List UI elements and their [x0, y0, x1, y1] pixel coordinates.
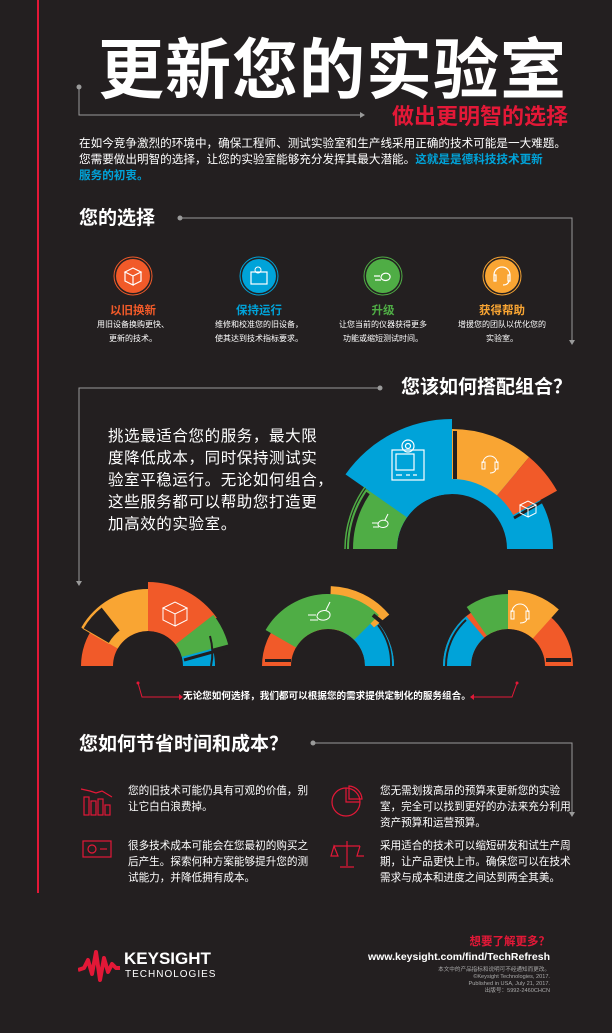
small donut C [443, 590, 573, 666]
text: shorten cycle: 需求与成本和进度之间达到两全其美。 [380, 872, 560, 884]
choice: upgrade: 升级 [372, 305, 394, 317]
title: 更新您的实验室 [98, 33, 567, 107]
text: old tech value [128, 784, 308, 813]
choice: keep running: 保持运行 [236, 305, 282, 317]
red vertical line [37, 0, 39, 893]
subtitle: 做出更明智的选择 [392, 104, 568, 129]
choice: get help [458, 256, 546, 343]
choice: upgrade [339, 256, 427, 343]
text: budget: 室，完全可以找到更好的办法来充分利用 [380, 801, 571, 813]
small donut A [81, 582, 228, 666]
caption: 无论您如何选择，我们都可以根据您的需求提供定制化的服务组合。 [183, 691, 471, 702]
icon: money [82, 840, 112, 858]
text: costs after purchase: 试能力，并降低拥有成本。 [128, 872, 255, 884]
logo: Keysight: KEYSIGHT [124, 949, 211, 968]
footer: learn more: 想要了解更多？ [470, 936, 550, 948]
combine paragraph [108, 428, 333, 533]
choice: trade-in: 更新的技术。 [109, 334, 157, 343]
intro paragraph: 服务的初衷。 [79, 169, 149, 182]
text: costs after purchase [128, 840, 308, 884]
heading: save time and cost: 您如何节省时间和成本？ [79, 734, 288, 755]
text: costs after purchase: 很多技术成本可能会在您最初的购买之 [128, 840, 308, 852]
choice: trade-in: 用旧设备换购更快、 [97, 320, 169, 329]
footer: learn more: www.keysight.com/find/TechRefresh [368, 951, 550, 963]
choice: get help: 获得帮助 [479, 305, 525, 317]
icon: bar chart [80, 788, 112, 816]
footer: learn more: 本文中的产品指标和说明可不经通知而更改。 [438, 967, 550, 973]
logo: Keysight [78, 949, 216, 982]
intro paragraph: 在如今竞争激烈的环境中，确保工程师、测试实验室和生产线采用正确的技术可能是一大难题。 [79, 137, 566, 150]
text: old tech value: 您的旧技术可能仍具有可观的价值，别 [128, 785, 308, 797]
panel: choices [97, 256, 546, 343]
heading: how to combine: 您该如何搭配组合？ [401, 377, 572, 398]
icon: box [520, 501, 536, 517]
icon: rabbit [372, 514, 388, 527]
text: budget: 资产预算和运营预算。 [380, 817, 486, 829]
intro paragraph: 您需要做出明智的选择，让您的实验室能够充分发挥其最大潜能。这就是是德科技技术更新 [79, 153, 543, 166]
combine paragraph: 加高效的实验室。 [108, 516, 237, 533]
choice: keep running: 使其达到技术指标要求。 [215, 334, 303, 343]
text: budget [380, 784, 571, 829]
combine paragraph: 验室平稳运行。无论如何组合， [108, 472, 333, 489]
icon: pie chart [331, 785, 363, 817]
footer: learn more [368, 935, 550, 994]
logo: Keysight: TECHNOLOGIES [125, 969, 216, 980]
icon: headset [482, 456, 498, 473]
choice: keep running: 维修和校准您的旧设备， [215, 320, 303, 329]
text: costs after purchase: 后产生。探索何种方案能够提升您的测 [128, 856, 308, 868]
choice: get help: 实验室。 [486, 334, 518, 343]
caption brackets [138, 683, 517, 697]
footer: learn more: Published in USA, July 21, 2017. [469, 981, 550, 987]
choice: upgrade: 让您当前的仪器获得更多 [339, 320, 427, 329]
small donut B [262, 586, 394, 666]
text: old tech value: 让它白白浪费掉。 [128, 801, 213, 813]
choice: trade-in: 以旧换新 [110, 305, 156, 317]
combine paragraph: 度降低成本，同时保持测试实 [108, 450, 317, 467]
icon: instrument gear [392, 440, 424, 480]
icon: scales [330, 841, 364, 868]
text: shorten cycle: 采用适合的技术可以缩短研发和试生产周 [380, 840, 571, 852]
text: budget: 您无需划拨高昂的预算来更新您的实验 [380, 785, 560, 797]
big donut [345, 419, 557, 549]
footer: learn more: 出版号：5992-2460CHCN [485, 988, 550, 994]
text: shorten cycle: 期，让产品更快上市。确保您可以在技术 [380, 856, 571, 868]
choice: keep running [215, 256, 303, 343]
choice: trade-in [97, 256, 169, 343]
combine paragraph: 这些服务都可以帮助您打造更 [108, 494, 317, 511]
choice: upgrade: 功能或缩短测试时间。 [343, 334, 423, 343]
heading: your choices: 您的选择 [79, 208, 155, 229]
choice: get help: 增援您的团队以优化您的 [458, 320, 546, 329]
footer: learn more: ©Keysight Technologies, 2017. [473, 974, 550, 980]
combine paragraph: 挑选最适合您的服务，最大限 [108, 428, 317, 445]
intro paragraph [79, 137, 566, 182]
text: shorten cycle [380, 840, 571, 884]
